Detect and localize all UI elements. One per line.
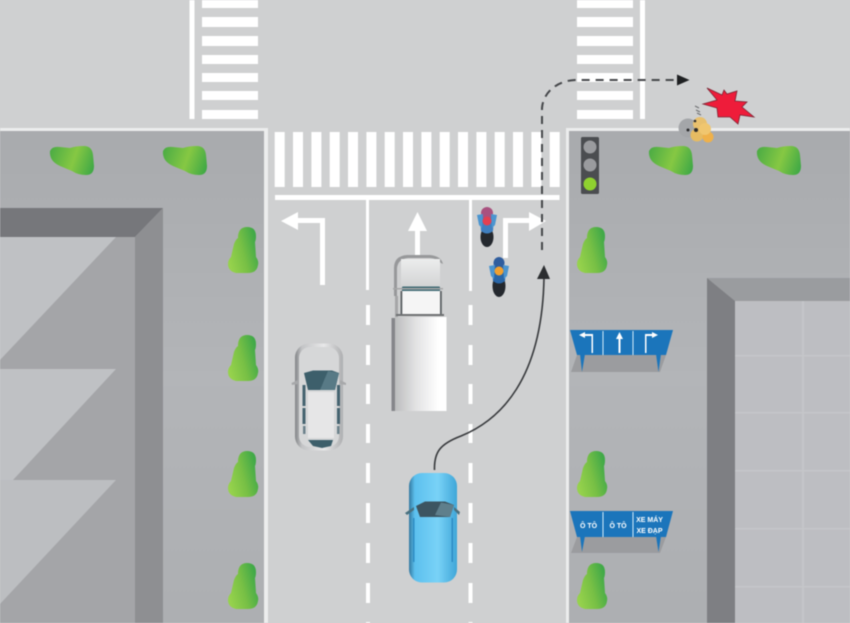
icon: red collision star <box>703 88 754 124</box>
lane divider: left <box>366 200 370 623</box>
sign label: motorbike and bicycle lane: XE MÁY <box>636 517 663 524</box>
panel: top-right pedestrian crossing <box>577 0 645 119</box>
icon: tree right top 2 <box>757 146 801 175</box>
sign: lane direction gantry <box>570 330 673 372</box>
icon: tree right top 1 <box>649 146 693 175</box>
arrow: dashed illegal turn path <box>542 74 690 250</box>
sign label: car lane 1: Ô TÔ <box>580 521 598 530</box>
panel: main pedestrian crossing <box>275 132 560 187</box>
icon: tree right 3 <box>577 563 607 609</box>
arrow: left turn road marking <box>281 212 325 285</box>
icon: tree left 1 <box>228 227 258 273</box>
icon: tree left top 1 <box>50 146 94 175</box>
lane divider: right <box>468 200 472 623</box>
panel: top-left pedestrian crossing <box>190 0 258 119</box>
panel: left building <box>0 208 163 623</box>
vehicle: motorbike two <box>489 257 509 297</box>
sign label: motorbike and bicycle lane: XE ĐẠP <box>636 528 663 535</box>
icon: tree right 2 <box>577 451 607 497</box>
icon: tree left 3 <box>228 451 258 497</box>
vehicle: motorbike one <box>477 207 497 247</box>
arrow: vehicle path to lane <box>434 265 550 470</box>
vehicle: white truck <box>392 255 446 411</box>
icon: tree left 2 <box>228 335 258 381</box>
arrow: right turn road marking <box>503 212 546 258</box>
panel: left sidewalk <box>0 128 268 623</box>
icon: tree left top 2 <box>163 146 207 175</box>
panel: right sidewalk <box>566 128 850 623</box>
arrow: straight road marking <box>408 212 427 256</box>
icon: traffic light <box>581 137 599 194</box>
icon: tree right 1 <box>577 227 607 273</box>
vehicle: silver car <box>292 344 346 450</box>
vehicle: blue car <box>405 473 460 582</box>
sign label: car lane 2: Ô TÔ <box>609 521 627 530</box>
stop line <box>275 195 560 200</box>
icon: tree left 4 <box>228 563 258 609</box>
panel: right building <box>707 278 850 623</box>
icon: fallen motorbike rider <box>678 106 714 142</box>
sign: vehicle type gantry <box>570 511 673 553</box>
